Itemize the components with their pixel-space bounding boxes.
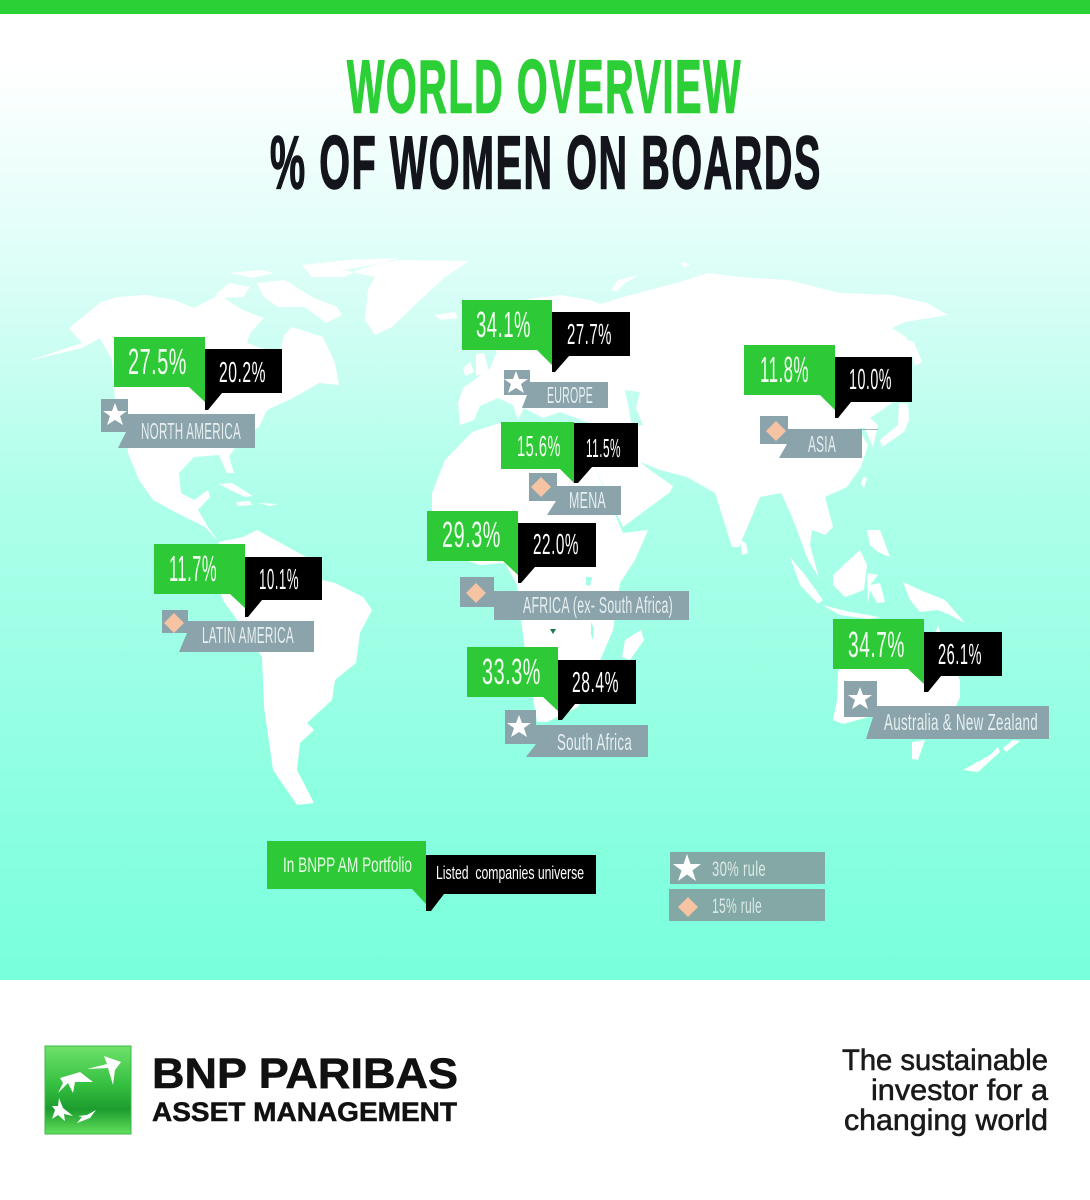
callout: asia: [744, 345, 912, 458]
world map: [28, 258, 1020, 805]
callout: europe: EUROPE: [547, 382, 593, 408]
green bubble: [427, 511, 518, 575]
region label: NORTH AMERICA: [141, 418, 241, 444]
callout: australia and new zealand: [833, 619, 1049, 739]
logo wordmark: BNP PARIBAS: [152, 1050, 458, 1098]
icon: star 30% rule: [848, 687, 872, 709]
icon: star 30% rule: [504, 371, 528, 393]
tagline: [842, 1044, 1048, 1137]
tagline line 2: investor for a: [871, 1074, 1048, 1107]
portfolio value: 34.1%: [476, 304, 531, 345]
region label: AFRICA (ex- South Africa): [523, 592, 673, 618]
label: 15% rule: [712, 895, 762, 918]
black bubble: [924, 632, 1002, 692]
icon: diamond 15% rule: [531, 477, 551, 497]
black bubble: [558, 660, 636, 720]
chip background: [670, 852, 825, 884]
universe value: 26.1%: [938, 639, 982, 671]
black bubble: [552, 312, 630, 372]
callout: asia: 11.8%: [760, 349, 809, 390]
logo green square: [45, 1046, 131, 1134]
map: south america: [215, 530, 372, 805]
banner: australia and new zealand: [844, 681, 1049, 739]
callout: africa: [427, 511, 689, 620]
region label: ASIA: [808, 431, 836, 457]
callout: latin america: 11.7%: [169, 548, 217, 589]
tagline line 3: changing world: [844, 1104, 1048, 1137]
portfolio value: 27.5%: [128, 341, 187, 382]
banner: latin america: [162, 610, 314, 652]
logo subline: ASSET MANAGEMENT: [152, 1097, 458, 1127]
callout: europe: [462, 300, 630, 408]
banner: africa: [460, 577, 689, 620]
green bubble: [154, 544, 245, 608]
map: caribbean islands: [219, 483, 278, 506]
map: eurasia: [458, 273, 948, 578]
icon: four swallows: [52, 1056, 121, 1123]
portfolio value: 29.3%: [442, 514, 501, 555]
chip background: [669, 889, 825, 921]
green bubble: [467, 647, 558, 711]
icon: star: [673, 854, 701, 881]
top green bar: [0, 0, 1090, 14]
callout: asia: 10.0%: [849, 364, 892, 396]
region label: LATIN AMERICA: [202, 622, 294, 648]
green bubble: [833, 619, 924, 684]
banner: europe: [504, 370, 608, 408]
map: australia and new zealand: [833, 625, 1020, 772]
green bubble: [501, 422, 574, 483]
footer white panel: [0, 980, 1090, 1200]
icon: star 30% rule: [103, 403, 127, 425]
portfolio value: 34.7%: [848, 624, 905, 665]
banner: north america: [101, 399, 255, 448]
universe value: 27.7%: [567, 319, 612, 351]
map: novaya zemlya, japan and asian islands: [611, 275, 965, 623]
key label: portfolio: In BNPP AM Portfolio: [283, 854, 412, 877]
decorative map specks: [538, 629, 556, 653]
universe value: 20.2%: [219, 357, 266, 389]
black bubble: [574, 423, 638, 483]
tagline line 1: The sustainable: [842, 1044, 1048, 1077]
callout: south africa: [467, 647, 648, 757]
map: africa: [432, 423, 648, 722]
legend: 15% rule: [669, 889, 825, 921]
portfolio value: 33.3%: [482, 651, 541, 692]
green bubble: [744, 345, 835, 410]
banner: south africa: [505, 710, 648, 757]
icon: diamond 15% rule: [164, 613, 184, 633]
green bubble: [462, 300, 552, 365]
callout: north america: [101, 337, 282, 448]
map: north america: [28, 295, 339, 542]
legend: speech bubble key: [267, 841, 596, 911]
universe value: 28.4%: [572, 667, 619, 699]
map: madagascar: [622, 630, 644, 660]
black bubble: [245, 557, 322, 617]
icon: diamond 15% rule: [766, 421, 786, 441]
black key bubble: [426, 855, 596, 911]
legend: 30% rule: [670, 852, 825, 884]
key label: universe: Listed companies universe: [436, 863, 584, 883]
connector line: [862, 429, 878, 430]
callout: latin america: [154, 544, 322, 652]
green bubble: [114, 337, 205, 402]
title: [270, 44, 822, 204]
icon: star 30% rule: [507, 715, 531, 737]
banner: asia: [760, 416, 862, 458]
title line: world overview: WORLD OVERVIEW: [347, 44, 742, 128]
callout: mena: [501, 422, 638, 515]
region label: South Africa: [557, 729, 632, 755]
map: arctic islands and greenland: [215, 258, 690, 376]
icon: diamond 15% rule: [466, 583, 486, 603]
logo: bnp paribas asset management: [45, 1046, 458, 1134]
region label: MENA: [569, 487, 606, 513]
icon: diamond: [678, 897, 698, 917]
callout: mena: 11.5%: [586, 433, 621, 463]
black bubble: [205, 349, 282, 410]
green key bubble: [267, 841, 426, 904]
banner: mena: [529, 473, 621, 515]
black bubble: [518, 523, 596, 583]
black bubble: [835, 357, 912, 418]
label: 30% rule: [712, 858, 766, 881]
universe value: 22.0%: [533, 529, 579, 561]
callout: latin america: 10.1%: [259, 564, 299, 596]
portfolio value: 15.6%: [517, 431, 561, 463]
